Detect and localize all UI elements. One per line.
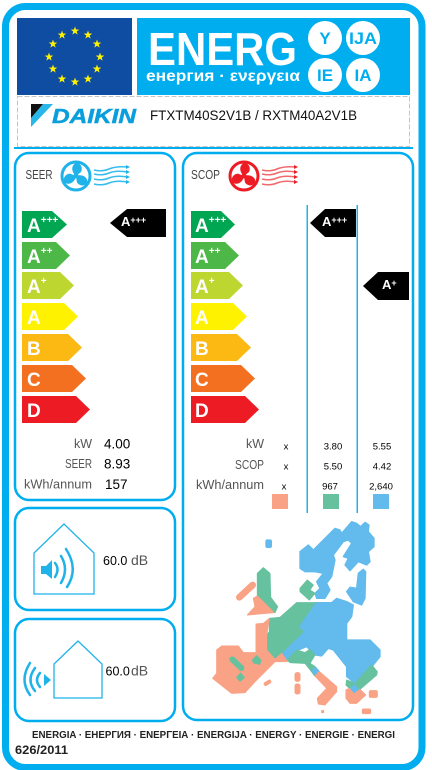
panel: SCOP bbox=[183, 153, 413, 720]
icon: indoor sound house bbox=[34, 524, 94, 594]
SCOP labels: kW bbox=[246, 437, 264, 451]
energy scale arrows: C bbox=[195, 370, 209, 391]
panel: SEER: 4.00 bbox=[104, 436, 130, 452]
energy scale arrows: A bbox=[195, 308, 209, 329]
energy scale arrows: A bbox=[195, 216, 209, 237]
SCOP values: 5.55 bbox=[373, 442, 391, 452]
Daikin logo: DAIKIN bbox=[52, 105, 137, 128]
SCOP values: 2,640 bbox=[369, 482, 393, 492]
SEER values: kWh/annum bbox=[24, 478, 92, 492]
SCOP values: 5.50 bbox=[324, 462, 342, 472]
energy scale arrows: +++ bbox=[209, 215, 226, 226]
SEER values bbox=[24, 437, 92, 492]
panel: indoor noise bbox=[15, 508, 175, 610]
footer languages: ENERGIA · ЕНЕРГИЯ · ΕΝΕΡΓΕΙΑ · ENERGIJA · ENERGY · ENERGIE · ENERGI bbox=[32, 730, 395, 741]
energy scale arrows: A bbox=[195, 277, 209, 298]
icon: outdoor sound house bbox=[24, 641, 102, 698]
SCOP values: 3.80 bbox=[324, 442, 342, 452]
rating pointer A+++: A bbox=[322, 214, 331, 229]
energy banner: ENERG bbox=[148, 23, 297, 75]
panel: outdoor noise bbox=[15, 619, 175, 721]
energy scale arrows: ++ bbox=[41, 246, 53, 257]
climate map of Europe bbox=[213, 522, 380, 714]
energy scale arrows: D bbox=[195, 401, 209, 422]
rating pointer A+: + bbox=[391, 278, 397, 288]
energy banner: IJA bbox=[349, 29, 377, 48]
SCOP values: x bbox=[282, 482, 287, 492]
energy scale arrows: + bbox=[209, 276, 215, 287]
rating pointer A+++ bbox=[110, 209, 166, 237]
energy scale arrows: A bbox=[27, 247, 41, 268]
rating pointer A+++: +++ bbox=[130, 215, 146, 225]
energy scale arrows bbox=[22, 211, 90, 423]
energy scale arrows: ++ bbox=[209, 246, 221, 257]
Daikin logo bbox=[31, 104, 137, 128]
energy banner: Y bbox=[319, 29, 331, 48]
SCOP labels bbox=[196, 437, 264, 492]
model box bbox=[18, 96, 410, 146]
energy scale arrows: + bbox=[41, 276, 47, 287]
SCOP values: x bbox=[284, 462, 289, 472]
SCOP values bbox=[282, 442, 393, 492]
energy banner: IE bbox=[317, 66, 333, 85]
icon: cooling fan bbox=[62, 162, 130, 190]
energy scale arrows: B bbox=[195, 339, 209, 360]
energy scale arrows: D bbox=[27, 401, 41, 422]
rating pointer A+++: +++ bbox=[331, 215, 347, 225]
rating pointer A+ bbox=[363, 272, 409, 300]
energy banner: IA bbox=[354, 66, 372, 85]
SCOP heading: SCOP bbox=[191, 168, 220, 182]
energy scale arrows: A bbox=[195, 247, 209, 268]
SEER values: SEER bbox=[65, 457, 92, 471]
indoor noise value: 60.0 bbox=[103, 554, 127, 568]
outdoor noise value: 60.0 bbox=[106, 664, 130, 678]
SCOP labels: kWh/annum bbox=[196, 478, 264, 492]
rating pointer A+: A bbox=[382, 277, 391, 292]
energy scale arrows: +++ bbox=[41, 215, 58, 226]
energy scale arrows: B bbox=[27, 339, 41, 360]
panel: SEER: 157 bbox=[105, 477, 128, 492]
SCOP values: x bbox=[284, 442, 289, 452]
climate colour keys bbox=[272, 494, 389, 509]
model number: FTXTM40S2V1B / RXTM40A2V1B bbox=[150, 108, 357, 123]
energy scale arrows: C bbox=[27, 370, 41, 391]
energy scale arrows: A bbox=[27, 216, 41, 237]
SCOP values: 967 bbox=[322, 482, 338, 492]
SCOP values: 4.42 bbox=[373, 462, 391, 472]
rating pointer A+++: A bbox=[121, 214, 130, 229]
energy banner: енергия · ενεργεια bbox=[146, 68, 301, 85]
regulation number: 626/2011 bbox=[15, 743, 68, 757]
outdoor noise value: dB bbox=[131, 662, 148, 678]
energy banner bbox=[137, 18, 410, 95]
panel: SEER: 8.93 bbox=[104, 456, 130, 472]
energy scale arrows bbox=[191, 211, 259, 423]
energy scale arrows: A bbox=[27, 277, 41, 298]
energy scale arrows: A bbox=[27, 308, 41, 329]
SCOP labels: SCOP bbox=[235, 458, 264, 472]
EU flag bbox=[17, 18, 132, 95]
panel: SEER bbox=[15, 153, 175, 500]
SEER values: kW bbox=[74, 437, 92, 451]
icon: heating fan bbox=[230, 162, 298, 190]
rating pointer A+++ bbox=[310, 209, 356, 237]
SEER heading: SEER bbox=[26, 168, 52, 182]
indoor noise value: dB bbox=[131, 552, 148, 568]
